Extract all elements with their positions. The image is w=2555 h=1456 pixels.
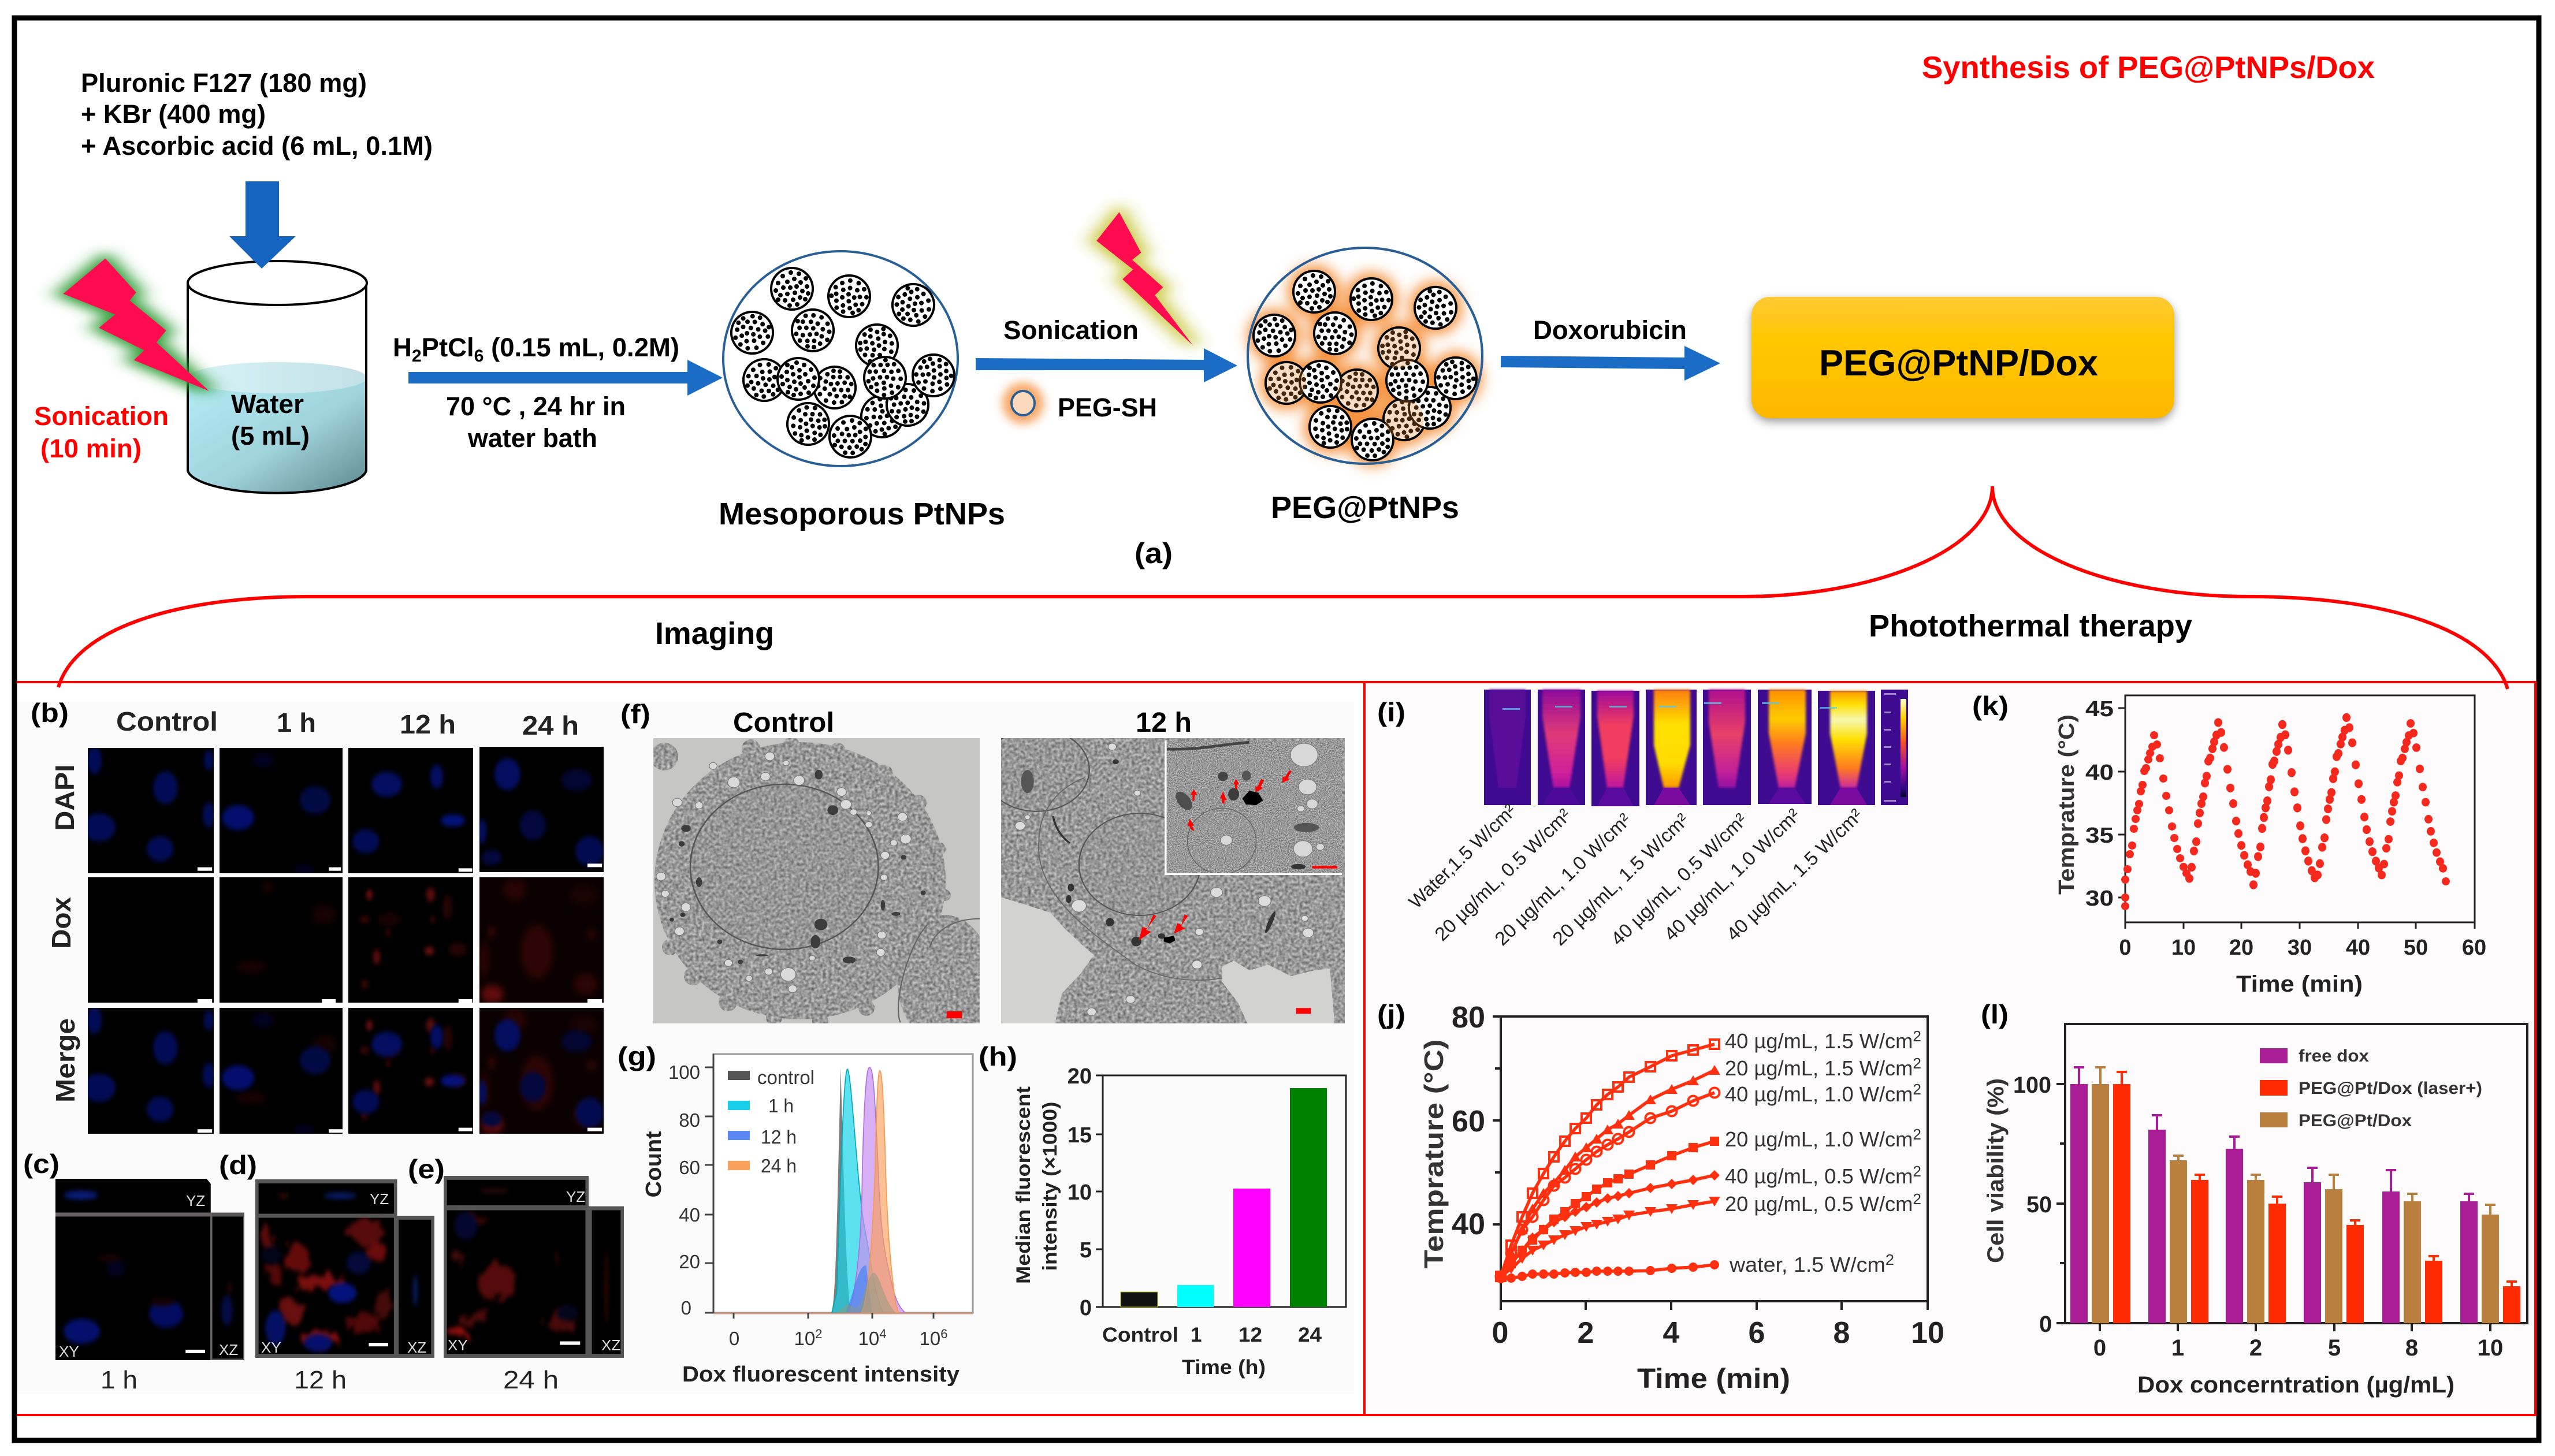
panel i: thermal images: 40 µg/mL, 0.5 W/cm² [1606, 809, 1751, 949]
panel e: 24 h z-stack: (e) [408, 1154, 445, 1184]
panel e: 24 h z-stack: YZ [566, 1188, 585, 1205]
panel k: photothermal cycling: 30 [2085, 887, 2114, 911]
panel c: 1 h z-stack: XY [59, 1343, 79, 1360]
panel j: heating curves: Temprature (°C) [1419, 1040, 1449, 1268]
lower panel background right [1366, 684, 2535, 1414]
panel k: photothermal cycling: 35 [2085, 824, 2114, 848]
panel l: cell viability bars: 2 [2249, 1335, 2262, 1361]
PEG@PtNPs: PEG@PtNPs [1271, 490, 1459, 525]
brown bars [2092, 1084, 2499, 1323]
panel h: median fluorescence bar chart: 12 [1239, 1324, 1262, 1346]
panel k: photothermal cycling: Time (min) [2236, 971, 2363, 997]
panel g: flow cytometry histogram: 6 [940, 1327, 947, 1341]
panel c: 1 h z-stack: (c) [23, 1149, 59, 1179]
panel l: cell viability bars: 5 [2328, 1335, 2341, 1361]
panel b: confocal grid: (b) [31, 698, 69, 728]
panel i: thermal images: (i) [1377, 697, 1405, 727]
panel h: median fluorescence bar chart: 20 [1068, 1064, 1092, 1089]
panel k: photothermal cycling: 50 [2404, 936, 2428, 960]
TEM 12 h [1001, 738, 1345, 1023]
panel h: median fluorescence bar chart: 5 [1080, 1238, 1092, 1263]
panel k: photothermal cycling: 40 [2346, 936, 2370, 960]
panel l: cell viability bars: 0 [2093, 1335, 2106, 1361]
curve labels: 20 µg/mL, 1.5 W/cm [1725, 1056, 1911, 1080]
beaker of water: (5 mL) [231, 421, 310, 450]
panel h: median fluorescence bar chart: 10 [1068, 1181, 1092, 1205]
curve labels: 40 µg/mL, 1.0 W/cm [1725, 1082, 1911, 1106]
curves [1501, 1044, 1715, 1279]
panel g: flow cytometry histogram: 10 [794, 1328, 815, 1349]
curve labels: 40 µg/mL, 0.5 W/cm [1725, 1164, 1911, 1188]
PEG-SH legend: PEG-SH [1058, 393, 1157, 422]
beaker of water [188, 261, 367, 493]
panel k: photothermal cycling [1972, 691, 2486, 997]
panel l: cell viability bars: Cell viability (%) [1983, 1078, 2009, 1263]
panel g: flow cytometry histogram: 10 [858, 1328, 879, 1349]
sonication label 2: Sonication [1003, 315, 1139, 345]
curve labels [1725, 1027, 1921, 1276]
H2PtCl6 conditions text: 6 [474, 347, 484, 366]
arrow: doxorubicin step [1501, 346, 1720, 381]
TEM inset [1165, 740, 1342, 875]
reagents text: + KBr (400 mg) [81, 99, 266, 129]
panel c: 1 h z-stack: 1 h [101, 1366, 137, 1394]
legend: 24 h [761, 1155, 797, 1176]
red bars [2113, 1084, 2520, 1323]
panel f: TEM images: (f) [620, 699, 650, 729]
panel h: median fluorescence bar chart: 15 [1068, 1123, 1092, 1148]
H2PtCl6 conditions text: H [393, 333, 411, 362]
panel h: median fluorescence bar chart: Time (h) [1182, 1356, 1266, 1379]
panel d: 12 h z-stack [219, 1150, 434, 1394]
sonication label: Sonication [34, 401, 169, 431]
PEG@PtNPs [1248, 248, 1485, 525]
panel k: photothermal cycling: 60 [2462, 936, 2486, 960]
panel label a: (a) [1135, 537, 1173, 569]
panel i: thermal images: 40 µg/mL, 1.5 W/cm² [1722, 805, 1866, 945]
TEM control [653, 738, 980, 1023]
panel i: thermal images [1377, 690, 1908, 949]
panel l: cell viability bars: 50 [2026, 1192, 2052, 1217]
panel g: flow cytometry histogram: 4 [879, 1327, 886, 1341]
panel c: 1 h z-stack: XZ [219, 1341, 238, 1358]
purple error bars [2074, 1067, 2474, 1201]
reagents text [81, 68, 433, 161]
sonication label [34, 401, 169, 463]
curve labels: 20 µg/mL, 1.0 W/cm [1725, 1127, 1911, 1151]
panel i: thermal images: 20 µg/mL, 0.5 W/cm² [1430, 805, 1575, 945]
panel f: TEM images: Control [733, 707, 834, 738]
legend [2260, 1047, 2482, 1130]
PEG-SH legend [1002, 382, 1157, 424]
panel l: cell viability bars: (l) [1981, 999, 2009, 1029]
H2PtCl6 conditions text: (0.15 mL, 0.2M) [484, 333, 679, 362]
panel i: thermal images: Water,1.5 W/cm² [1404, 800, 1520, 913]
curve labels: water, 1.5 W/cm [1730, 1253, 1879, 1276]
panel k: photothermal cycling: 45 [2085, 697, 2114, 721]
doxorubicin label: Doxorubicin [1533, 315, 1687, 345]
panel g: flow cytometry histogram: 40 [679, 1204, 700, 1226]
panel k: photothermal cycling: Temprature (°C) [2055, 714, 2079, 895]
panel b: confocal grid: Control [116, 706, 218, 736]
panel k: photothermal cycling: 10 [2171, 936, 2196, 960]
lower panel background left [17, 702, 1354, 1394]
panel c: 1 h z-stack: YZ [186, 1192, 205, 1209]
curve labels: 2 [1913, 1027, 1921, 1045]
product box: PEG@PtNP/Dox [1819, 343, 2098, 383]
panel l: cell viability bars: 1 [2171, 1335, 2184, 1361]
panel j: heating curves: 0 [1492, 1316, 1508, 1350]
panel d: 12 h z-stack: YZ [370, 1190, 389, 1208]
lower section red frame [17, 682, 2535, 1415]
H2PtCl6 conditions text: PtCl [422, 333, 474, 362]
panel f: TEM images: 12 h [1136, 707, 1192, 738]
panel j: heating curves [1377, 999, 1944, 1394]
panel g: flow cytometry histogram: 0 [729, 1328, 739, 1349]
panel g: flow cytometry histogram: 20 [679, 1251, 700, 1272]
panel k: photothermal cycling: (k) [1972, 691, 2009, 721]
panel b: confocal grid: 24 h [522, 710, 579, 740]
curve labels: 2 [1913, 1081, 1921, 1098]
panel b: confocal grid: 1 h [277, 707, 316, 738]
panel g: flow cytometry histogram: Dox fluorescent intensity [682, 1362, 959, 1387]
legend: 1 h [768, 1095, 794, 1116]
panel b: confocal grid: DAPI [50, 765, 80, 831]
panel l: cell viability bars: 10 [2478, 1335, 2503, 1361]
panel h: median fluorescence bar chart: intensity (×1000) [1039, 1102, 1061, 1271]
curve labels: 40 µg/mL, 1.5 W/cm [1725, 1029, 1911, 1053]
panel g: flow cytometry histogram: 80 [679, 1109, 700, 1131]
heading: imaging: Imaging [655, 616, 774, 651]
panel g: flow cytometry histogram: 100 [668, 1062, 700, 1083]
panel h: median fluorescence bar chart: 1 [1191, 1324, 1202, 1346]
curve labels: 2 [1913, 1126, 1921, 1143]
panel d: 12 h z-stack: XZ [407, 1339, 426, 1356]
panel g: flow cytometry histogram: 10 [920, 1328, 940, 1349]
red brace [58, 486, 2508, 689]
sonication label: (10 min) [40, 434, 142, 463]
mesoporous PtNPs: Mesoporous PtNPs [719, 497, 1005, 531]
legend: PEG@Pt/Dox (laser+) [2299, 1079, 2482, 1098]
panel j: heating curves: 8 [1833, 1316, 1850, 1350]
panel g: flow cytometry histogram: 60 [679, 1157, 700, 1178]
icon: lightning right [1096, 212, 1193, 345]
panel k: photothermal cycling: 20 [2229, 936, 2253, 960]
panel b: confocal grid [31, 698, 604, 1135]
panel e: 24 h z-stack: XZ [601, 1336, 620, 1354]
H2PtCl6 conditions text [393, 333, 679, 453]
panel h: median fluorescence bar chart [979, 1041, 1346, 1379]
panel k: photothermal cycling: 0 [2119, 936, 2132, 960]
heading: photothermal therapy: Photothermal therapy [1869, 609, 2192, 643]
panel f: TEM images [620, 699, 1345, 1023]
H2PtCl6 conditions text: 2 [412, 347, 422, 366]
panel l: cell viability bars: 100 [2013, 1073, 2051, 1098]
panel g: flow cytometry histogram [618, 1041, 973, 1387]
panel d: 12 h z-stack: 12 h [294, 1366, 347, 1394]
panel e: 24 h z-stack [408, 1154, 624, 1394]
panel i: thermal images: 20 µg/mL, 1.0 W/cm² [1490, 809, 1635, 949]
legend: control [757, 1067, 815, 1088]
reagents text: + Ascorbic acid (6 mL, 0.1M) [81, 131, 433, 161]
title: Synthesis of PEG@PtNPs/Dox [1922, 50, 2375, 85]
panel c: 1 h z-stack [23, 1149, 244, 1394]
panel e: 24 h z-stack: 24 h [503, 1366, 559, 1394]
panel j: heating curves: (j) [1377, 999, 1405, 1029]
panel l: cell viability bars: 8 [2405, 1335, 2418, 1361]
panel j: heating curves: 6 [1749, 1316, 1765, 1350]
purple bars [2070, 1084, 2478, 1323]
legend: PEG@Pt/Dox [2299, 1111, 2412, 1130]
arrow: sonication step [976, 348, 1237, 382]
panel j: heating curves: 4 [1663, 1316, 1680, 1350]
panel g: flow cytometry histogram: Count [642, 1131, 666, 1198]
legend: free dox [2299, 1047, 2369, 1066]
panel l: cell viability bars: 0 [2039, 1312, 2052, 1337]
arrow: reagents into beaker [229, 181, 296, 269]
panel g: flow cytometry histogram: 2 [815, 1327, 822, 1341]
arrow: H2PtCl6 step [408, 360, 723, 396]
panel l: cell viability bars [1981, 999, 2527, 1398]
panel h: median fluorescence bar chart: (h) [979, 1041, 1017, 1071]
reagents text: Pluronic F127 (180 mg) [81, 68, 367, 98]
panel j: heating curves: 40 [1452, 1208, 1485, 1241]
panel e: 24 h z-stack: XY [448, 1336, 468, 1354]
H2PtCl6 conditions text: 70 °C , 24 hr in [446, 392, 626, 421]
panel h: median fluorescence bar chart: Median fluorescent [1013, 1086, 1035, 1284]
panel h: median fluorescence bar chart: Control [1102, 1324, 1178, 1346]
panel b: confocal grid: 12 h [400, 709, 456, 739]
brown error bars [2095, 1067, 2496, 1215]
panel j: heating curves: Time (min) [1637, 1364, 1790, 1394]
panel j: heating curves: 2 [1578, 1316, 1594, 1350]
curve labels: 2 [1885, 1251, 1894, 1268]
product box [1751, 297, 2174, 422]
curve labels: 2 [1913, 1055, 1921, 1072]
panel i: thermal images: 40 µg/mL, 1.0 W/cm² [1660, 805, 1804, 945]
panel i: thermal images: 20 µg/mL, 1.5 W/cm² [1548, 809, 1693, 949]
panel l: cell viability bars: Dox concerntration (µg/mL) [2137, 1372, 2454, 1398]
panel b: confocal grid: Merge [50, 1018, 80, 1103]
panel j: heating curves: 60 [1452, 1105, 1485, 1138]
panel d: 12 h z-stack: XY [261, 1339, 281, 1356]
panel h: median fluorescence bar chart: 0 [1080, 1296, 1092, 1320]
mesoporous PtNPs [719, 251, 1005, 531]
panel g: flow cytometry histogram: (g) [618, 1041, 656, 1071]
legend: 12 h [761, 1126, 797, 1148]
panel j: heating curves: 80 [1452, 1001, 1485, 1034]
curve labels: 2 [1913, 1190, 1921, 1208]
icon: lightning left [63, 259, 209, 391]
panel h: median fluorescence bar chart: 24 [1298, 1324, 1322, 1346]
panel b: confocal grid: Dox [46, 897, 76, 949]
legend [728, 1067, 815, 1176]
data points [2121, 717, 2450, 910]
curve labels: 2 [1913, 1163, 1921, 1180]
panel k: photothermal cycling: 30 [2288, 936, 2312, 960]
panel d: 12 h z-stack: (d) [219, 1150, 257, 1180]
panel g: flow cytometry histogram: 0 [681, 1297, 691, 1319]
panel k: photothermal cycling: 40 [2085, 761, 2114, 785]
curve labels: 20 µg/mL, 0.5 W/cm [1725, 1192, 1911, 1216]
red error bars [2117, 1072, 2517, 1286]
H2PtCl6 conditions text: water bath [467, 423, 597, 453]
beaker of water: Water [231, 389, 304, 419]
panel j: heating curves: 10 [1911, 1316, 1944, 1350]
